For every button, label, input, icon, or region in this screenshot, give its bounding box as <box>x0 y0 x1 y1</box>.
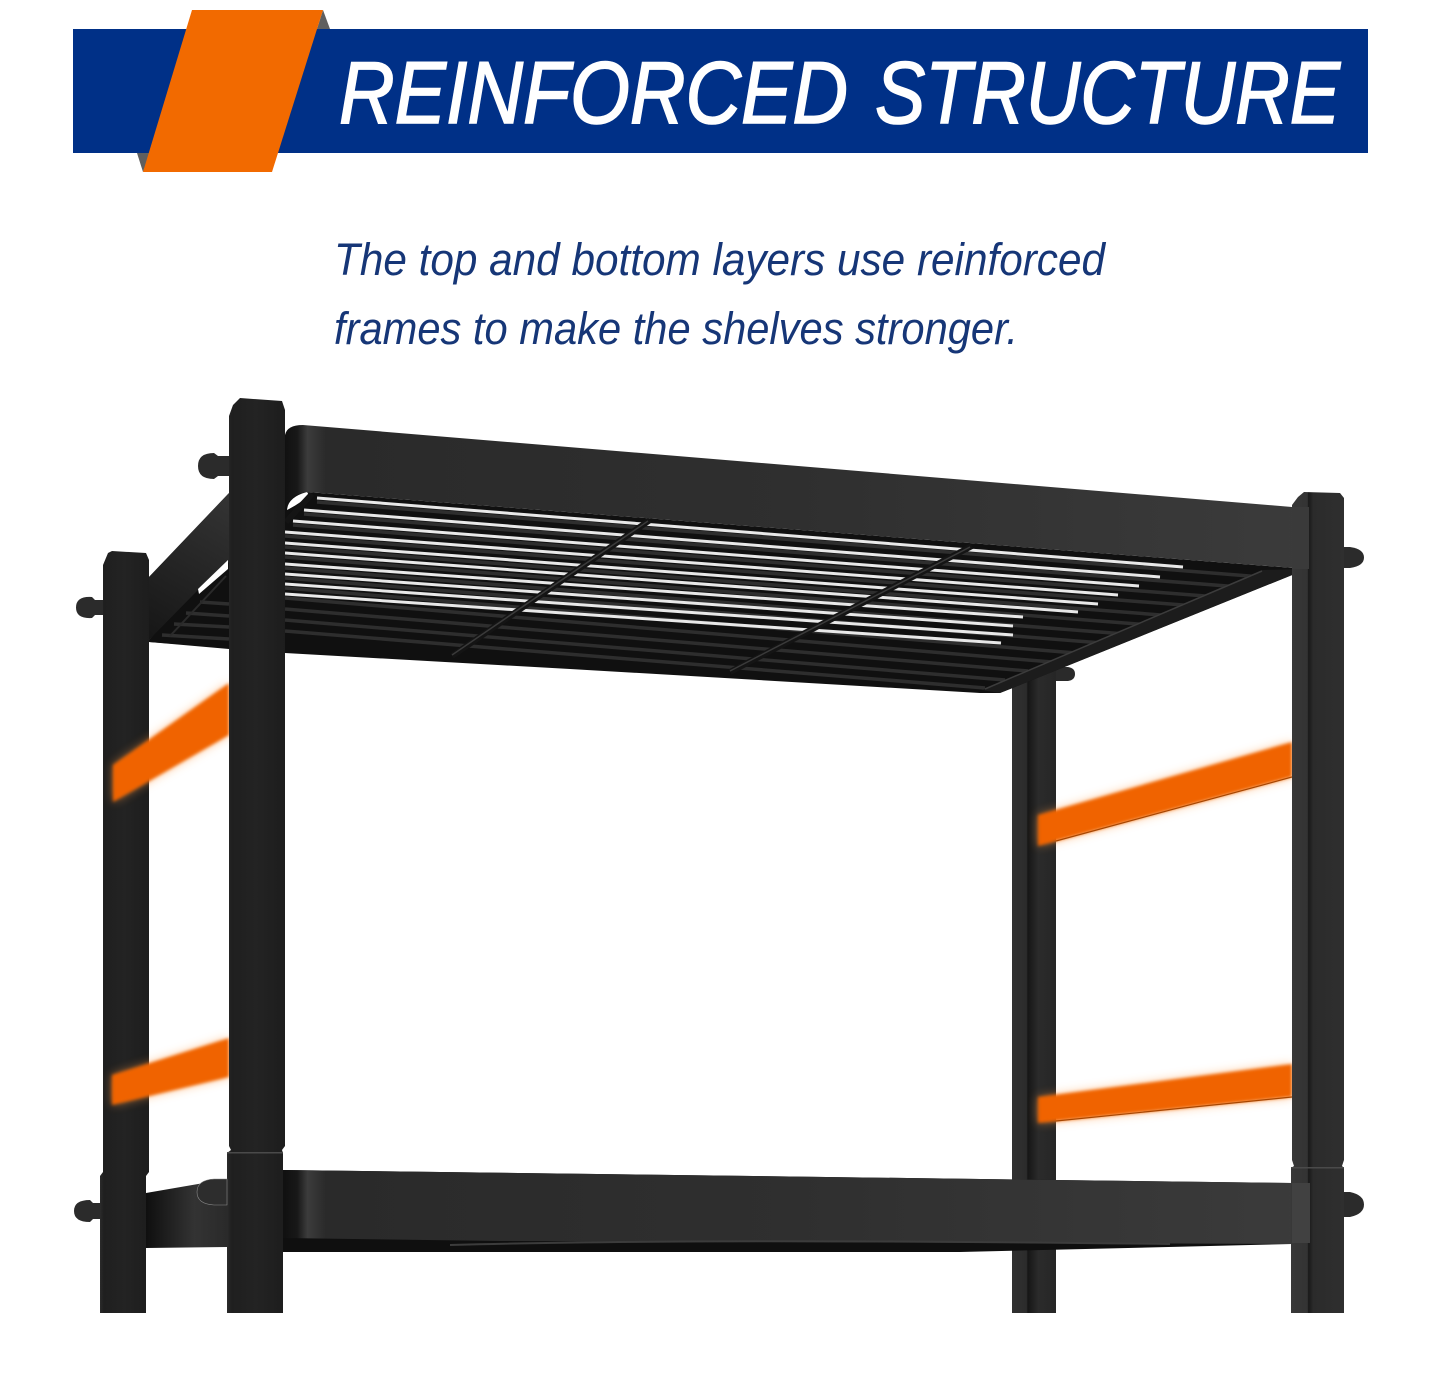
rear left lower bolt <box>74 1200 100 1222</box>
front left lower bolt <box>197 1179 227 1205</box>
bottom shelf left side rail <box>146 1179 227 1248</box>
white gaps at the left frame <box>198 560 228 594</box>
shelf rack illustration <box>74 398 1364 1313</box>
rear left post <box>100 551 149 1313</box>
cross bars <box>170 494 972 672</box>
top shelf wire mesh <box>149 492 1307 693</box>
rear right upper bolt <box>1056 667 1075 681</box>
rear left upper bolt <box>76 597 103 618</box>
highlighted rods <box>285 498 1183 643</box>
title <box>339 43 1341 142</box>
orange highlight: right lower brace <box>1038 1064 1292 1123</box>
description text: frames to make the shelves stronger. <box>334 303 1018 354</box>
banner <box>73 10 1368 172</box>
front right lower bolt <box>1344 1192 1364 1217</box>
rear right post <box>1012 670 1056 1313</box>
orange highlight: left upper brace <box>113 683 229 802</box>
front right upper bolt <box>1344 547 1364 568</box>
dark rods <box>162 502 1262 688</box>
mesh base <box>149 492 1307 693</box>
right frame bar <box>982 569 1307 693</box>
bottom shelf front rail <box>283 1170 1310 1252</box>
title: REINFORCED <box>339 43 848 142</box>
description text <box>334 234 1107 354</box>
description text: The top and bottom layers use reinforced <box>334 234 1107 285</box>
front left upper bolt <box>198 453 229 479</box>
front left post <box>227 398 285 1313</box>
ribbon fold shadows <box>137 10 330 172</box>
banner background <box>73 29 1368 153</box>
orange ribbon <box>143 10 323 172</box>
top shelf front rail <box>285 425 1307 569</box>
orange highlight: right upper brace <box>1038 742 1292 846</box>
front right post <box>1291 492 1344 1313</box>
title: STRUCTURE <box>875 43 1341 142</box>
top shelf left side rail <box>149 493 229 648</box>
orange highlight: left lower brace <box>112 1038 229 1105</box>
